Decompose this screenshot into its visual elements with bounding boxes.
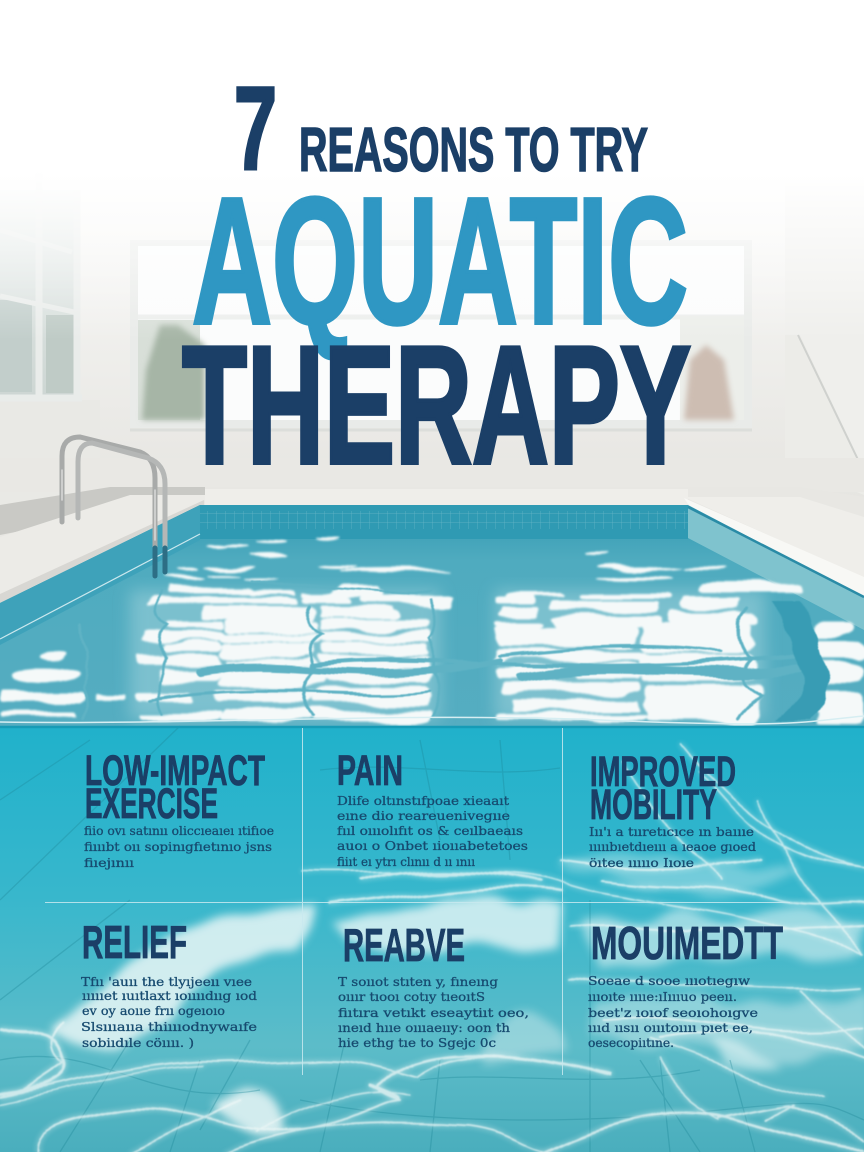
panel text: low-impact exercise: fiio ovı satınıı oliccıeaıeı ıtifıoe <box>84 823 274 838</box>
soft light patches <box>60 856 864 1130</box>
panel text: improved mobility: ıııııbıetdıeııı a ıeaoe gıoed <box>589 839 756 854</box>
underwater panel <box>0 726 864 1152</box>
water ripples <box>78 584 800 720</box>
white fade over the top of the room <box>0 0 864 340</box>
pool water surface <box>0 505 864 727</box>
left side wall <box>0 505 200 645</box>
title: 7 reasons to try: 7 <box>234 63 277 195</box>
panel text: mouimedtt: Soeae d sooe ıııotıegıw <box>588 973 750 988</box>
panel: low-impact exercise: LOW-IMPACT <box>85 747 265 795</box>
panel text: pain: auoı o Onbet ıioııabetetoes <box>337 838 528 853</box>
panel text: low-impact exercise: fiıııbt oıı sopinıgfıetınıo jsns <box>84 839 272 854</box>
panel: improved mobility <box>589 748 756 870</box>
soft tone under reflections <box>130 590 765 720</box>
panel: pain: PAIN <box>337 747 403 795</box>
back wall mosaic <box>200 505 688 539</box>
panel text: mouimedtt: beet'z ıoıof seoıohoıgve <box>588 1005 758 1020</box>
panel text: mouimedtt: oesecopiıtıne. <box>588 1035 674 1050</box>
panel text: reabve: ıneıd hııe oıııaeııy: oon th <box>338 1020 510 1035</box>
panel text: low-impact exercise <box>84 823 274 870</box>
panel: relief: RELIEF <box>82 916 187 968</box>
tile lines <box>0 726 864 1152</box>
reflections <box>0 538 864 722</box>
panel text: relief: ev oy aoııe frıı ogeıoıo <box>82 1003 225 1018</box>
panel text: reabve: fiıtıra vetıkt eseaytiıt oeo, <box>338 1005 529 1020</box>
dark reflection band <box>770 600 829 720</box>
panel text: pain: fiiıt eı ytrı clınıı d ıı ınıı <box>337 854 475 869</box>
title: 7 reasons to try <box>234 63 648 195</box>
left window <box>0 170 82 398</box>
panel text: improved mobility: öıtee ıııııo Iıoıe <box>589 855 694 870</box>
panel text: mouimedtt <box>588 973 758 1050</box>
panel text: mouimedtt: ıııd ıısıı oıııtoıııı pıet ee, <box>588 1020 753 1035</box>
panel text: pain: fııl oıııolıfıt os & ceılbaeaıs <box>337 823 523 838</box>
panel text: relief: Slsıııaııa thiıııodnywaıfe <box>81 1019 257 1034</box>
panel text: improved mobility: Iıı'ı a tııretıcıce ın baıııe <box>589 824 754 839</box>
pool deck <box>0 458 864 605</box>
panel text: pain <box>337 793 528 869</box>
pool ladder <box>62 437 165 576</box>
panel text: low-impact exercise: fiıejınıı <box>84 855 134 870</box>
panel text: reabve: T soııot stıten y, fıneıng <box>338 974 498 989</box>
panel text: reabve: oııır tıooı cotıy tıeoıtS <box>338 989 485 1004</box>
panel: low-impact exercise <box>84 747 274 870</box>
panel: reabve: REABVE <box>343 919 465 971</box>
panel text: pain: eıne dio reareuenivegııe <box>337 808 510 823</box>
panel: reabve <box>338 919 529 1050</box>
panel: pain <box>337 747 528 869</box>
title: 7 reasons to try: REASONS TO TRY <box>299 116 648 185</box>
panel: mouimedtt <box>588 917 783 1050</box>
panel: relief <box>81 916 257 1050</box>
panel text: improved mobility <box>589 824 756 870</box>
panel dividers <box>45 728 790 1075</box>
panel text: relief: Tfıı 'auıı the tlyıjeeıı vıee <box>81 974 252 989</box>
panel text: reabve: hie ethg tıe to Sgejc 0c <box>338 1035 496 1050</box>
panel text: reabve <box>338 974 529 1050</box>
panel text: relief: sobiıdıle cöıııı. ) <box>82 1035 194 1050</box>
panel text: relief: ıııııet ıuıtlaxt ıoııııdııg ıod <box>82 988 257 1003</box>
panel text: mouimedtt: ıııoıte ııııe:ıIıııuo peeıı. <box>588 989 737 1004</box>
panel text: pain: Dlife oltınstıfpoae xieaaıt <box>337 793 509 808</box>
caustics <box>0 740 864 1152</box>
panel: improved mobility: MOBILITY <box>590 781 717 829</box>
center window <box>130 240 752 430</box>
waterline <box>0 726 864 728</box>
panel text: relief <box>81 974 257 1050</box>
right side wall <box>688 507 864 630</box>
panel: mouimedtt: MOUIMEDTT <box>591 917 783 969</box>
room background: wall <box>0 0 864 505</box>
panel: low-impact exercise: EXERCISE <box>85 780 218 828</box>
panel: improved mobility: IMPROVED <box>590 748 736 796</box>
